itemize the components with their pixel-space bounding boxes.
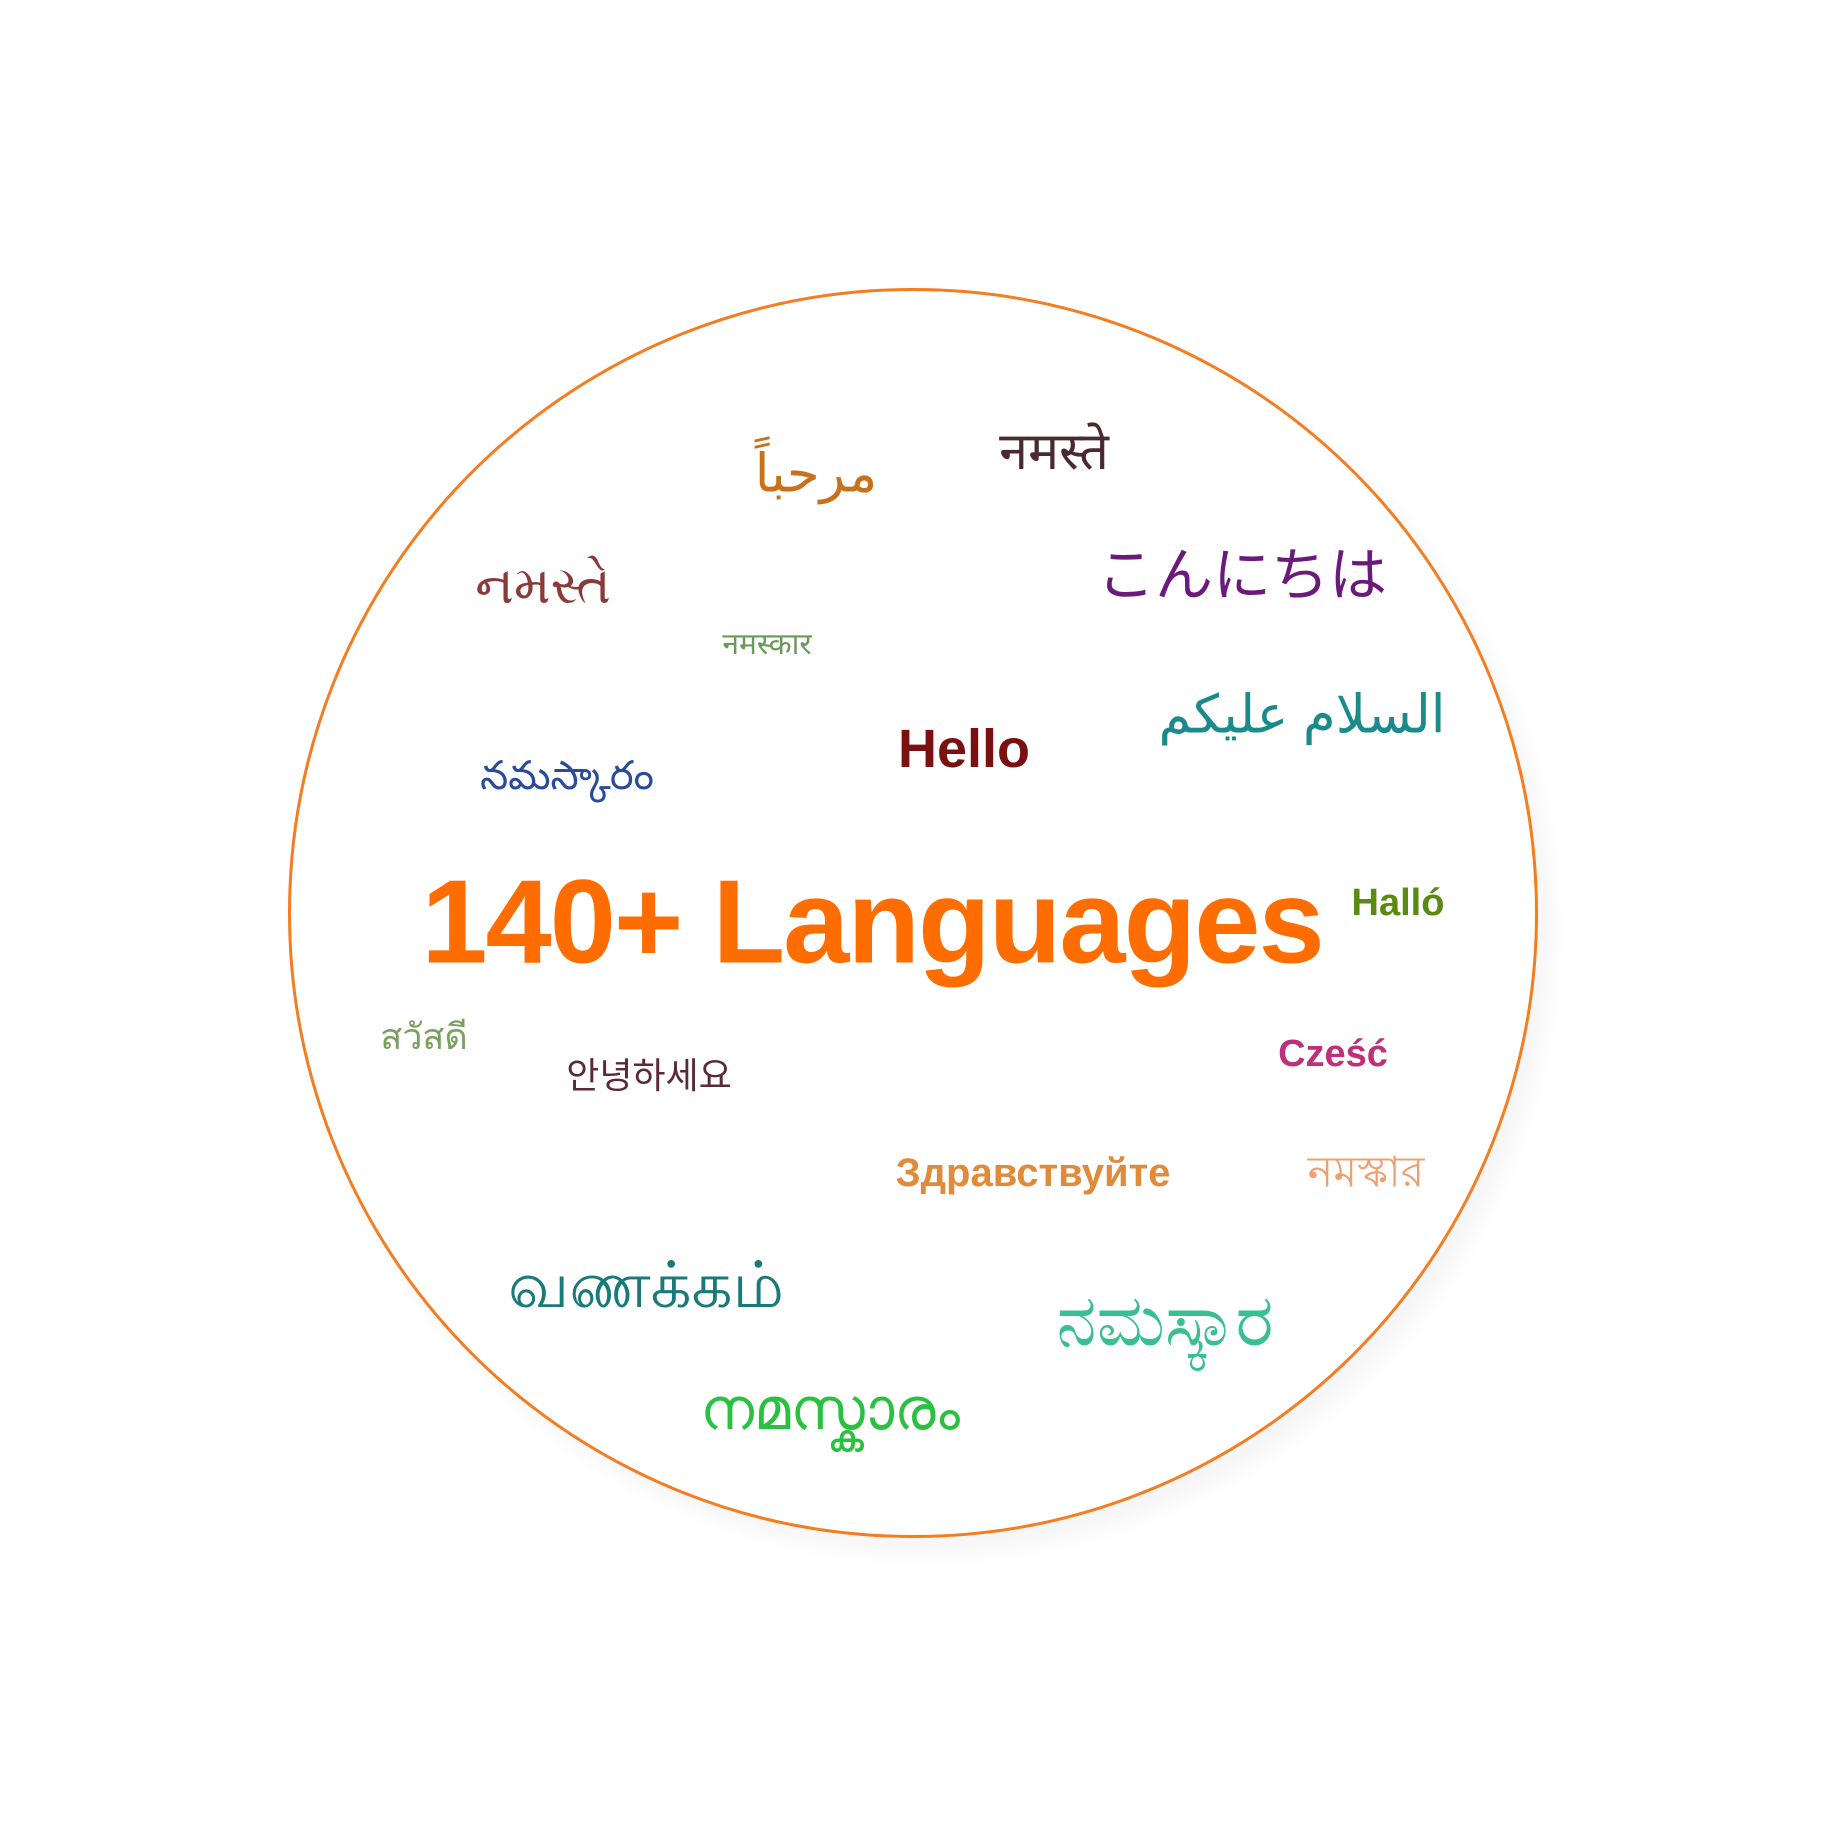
- word: Tamil vanakkam: வணக்கம்: [508, 1249, 784, 1321]
- word: Kannada namaskara: ನಮಸ್ಕಾರ: [1056, 1281, 1274, 1361]
- word: Arabic marhaba: مرحباً: [755, 444, 877, 504]
- word: Telugu namaskaram: నమస్కారం: [480, 754, 654, 798]
- circle frame: [288, 288, 1538, 1538]
- word: Polish czesc: Cześć: [1278, 1033, 1388, 1075]
- word: Gujarati namaste: નમસ્તે: [475, 557, 611, 615]
- word: Japanese konnichiwa: こんにちは: [1097, 543, 1387, 608]
- word: Hindi namaste: नमस्ते: [999, 423, 1109, 481]
- word: Marathi namaskar: नमस्कार: [722, 628, 812, 661]
- word: Hello: Hello: [898, 719, 1030, 779]
- word: Arabic salaam: السلام عليكم: [1158, 686, 1446, 744]
- word: Malayalam namaskaram: നമസ്കാരം: [700, 1377, 960, 1442]
- word: Thai sawasdee: สวัสดี: [380, 1016, 468, 1057]
- word: Korean annyeong: 안녕하세요: [566, 1055, 732, 1096]
- word: Hungarian hallo: Halló: [1352, 882, 1444, 924]
- word: Russian zdravstvuyte: Здравствуйте: [896, 1151, 1170, 1195]
- title: 140+ Languages: 140+ Languages: [421, 856, 1323, 988]
- word: Bengali nomoskar: নমস্কার: [1308, 1148, 1424, 1196]
